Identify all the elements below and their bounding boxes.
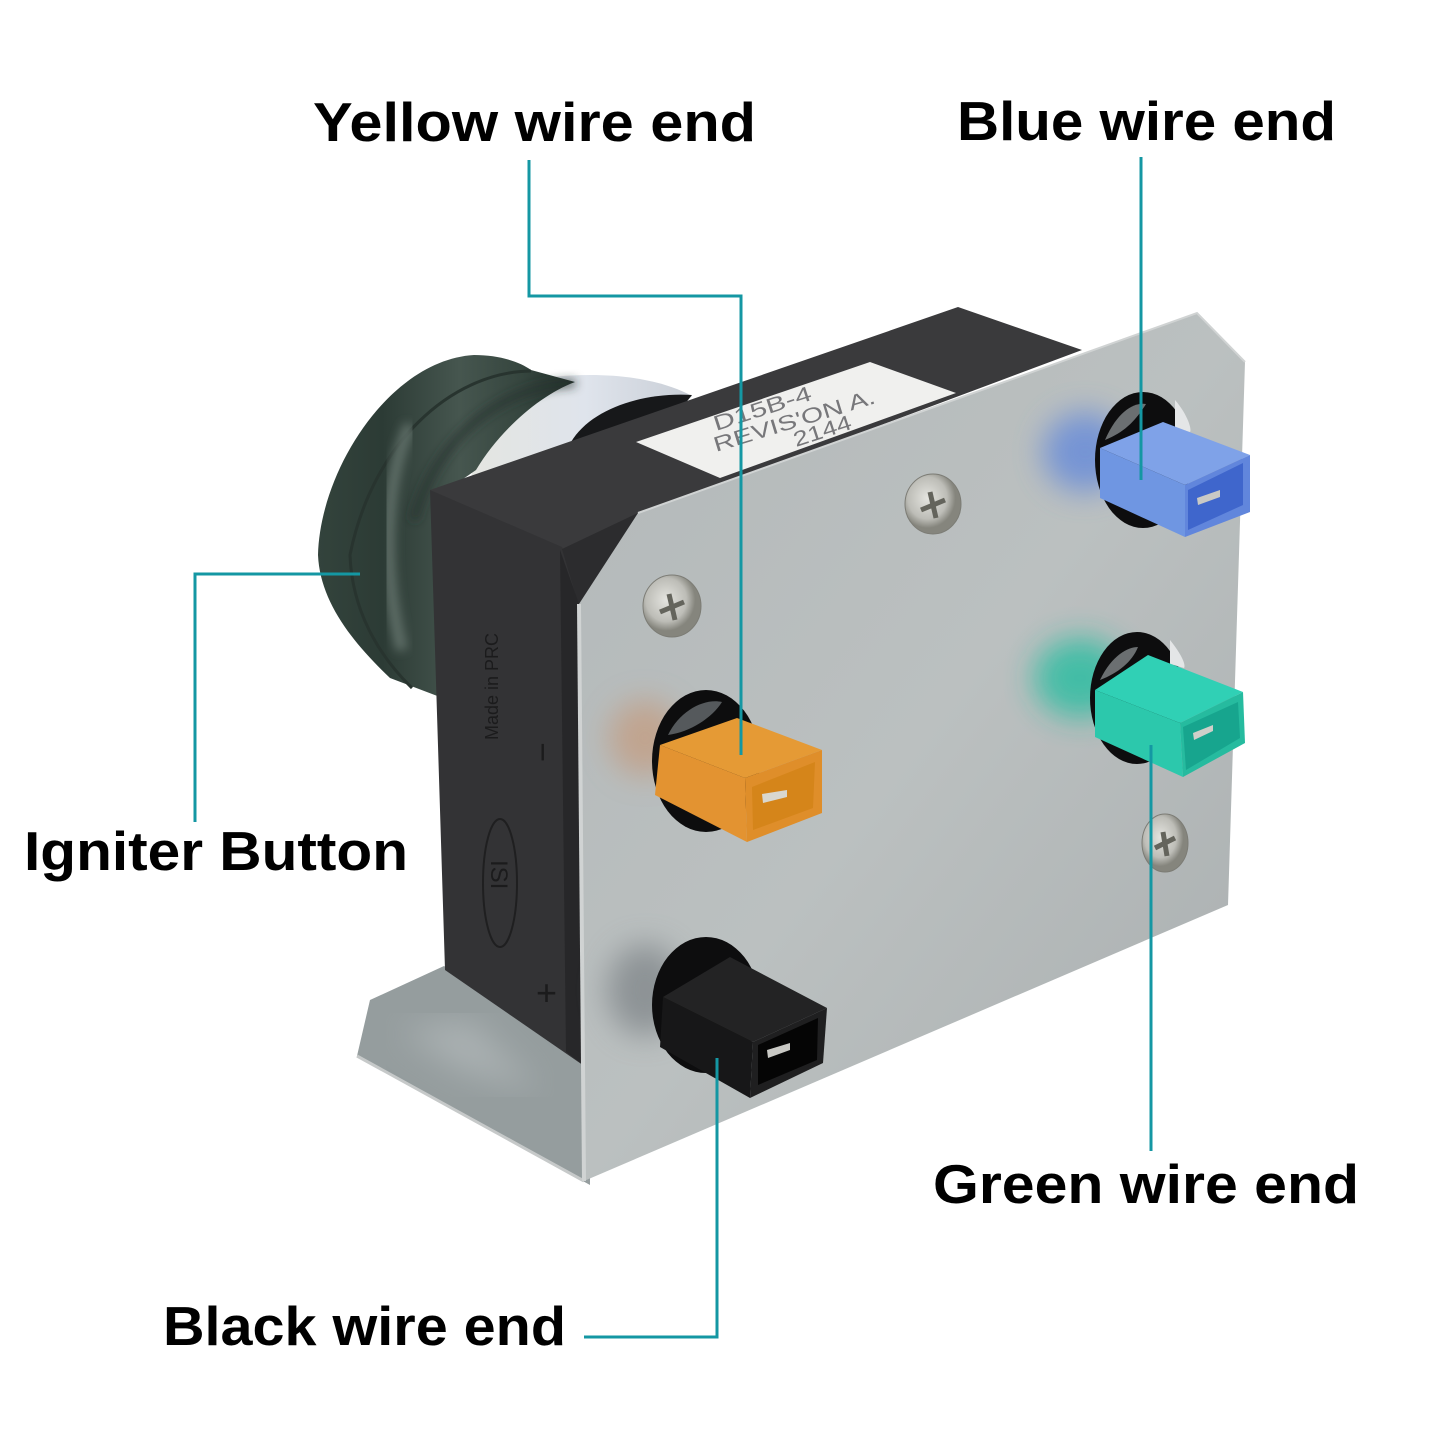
- connector: orange: [655, 718, 822, 842]
- leader: black wire: [584, 1058, 717, 1337]
- label sticker: [636, 362, 956, 478]
- leader: yellow wire: [529, 160, 741, 755]
- leader: green wire: [1150, 745, 1152, 1151]
- label: green wire end: Green wire end: [933, 1153, 1359, 1215]
- housing: [430, 307, 1082, 1070]
- mounting plate: [579, 313, 1245, 1181]
- connector holes: [652, 392, 1191, 1073]
- igniter button: [318, 355, 692, 697]
- connector: black: [660, 957, 827, 1098]
- label sticker: REVIS'ON A.: [711, 386, 878, 457]
- leader: blue wire: [1140, 157, 1142, 480]
- connector: green: [1095, 655, 1245, 777]
- connector: blue: [1100, 422, 1250, 537]
- housing markings: ISI: [485, 860, 512, 889]
- housing markings: −: [524, 742, 562, 762]
- label sticker: D15B-4: [710, 382, 815, 436]
- base plate: [357, 966, 590, 1185]
- housing markings: +: [536, 972, 557, 1013]
- colour glows: [607, 412, 1127, 1036]
- leader: igniter button: [195, 574, 360, 822]
- housing markings: [482, 633, 562, 1013]
- label: yellow wire end: Yellow wire end: [313, 91, 756, 153]
- screws: [643, 474, 1188, 872]
- housing markings: Made in PRC: [482, 633, 502, 740]
- label: black wire end: Black wire end: [163, 1295, 566, 1357]
- label sticker: 2144: [790, 411, 855, 452]
- label: blue wire end: Blue wire end: [957, 90, 1336, 152]
- label: igniter button: Igniter Button: [24, 820, 408, 882]
